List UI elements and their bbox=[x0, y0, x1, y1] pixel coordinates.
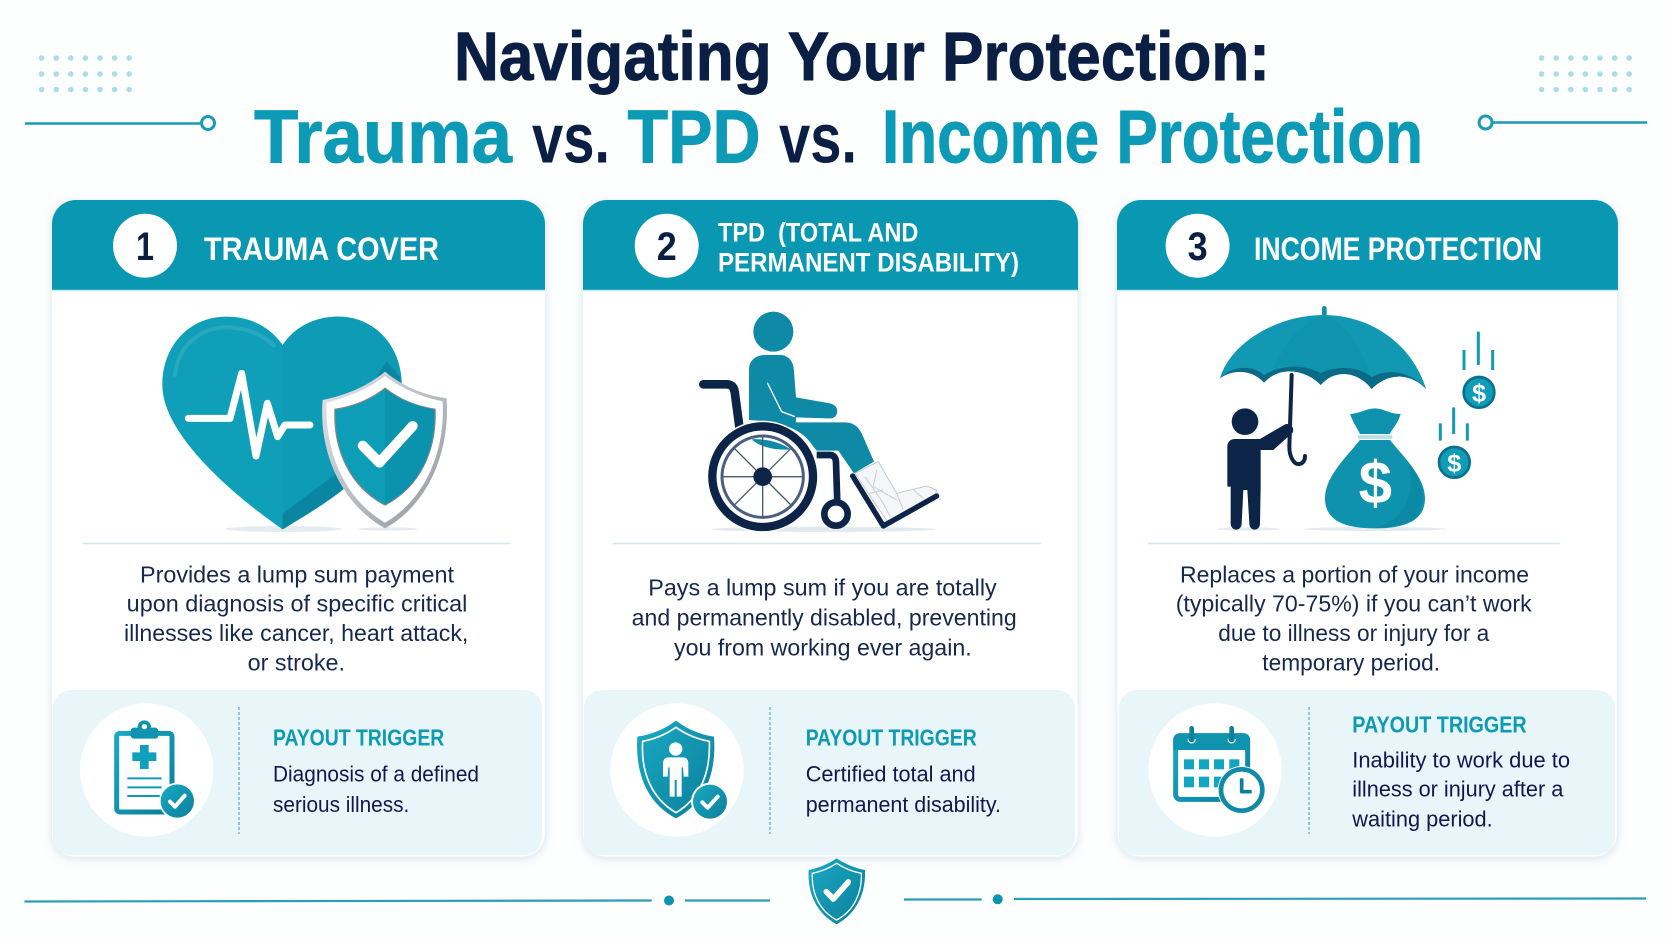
header band bbox=[583, 200, 1078, 290]
description text: illnesses like cancer, heart attack, bbox=[124, 620, 468, 646]
icon: calendar with clock bbox=[1173, 728, 1266, 814]
description text bbox=[1176, 561, 1532, 676]
footer divider with shield bbox=[24, 858, 1646, 924]
decoration: right title line bbox=[1479, 116, 1647, 129]
description text: upon diagnosis of specific critical bbox=[127, 591, 467, 617]
title: TPD bbox=[628, 95, 760, 179]
title: vs. bbox=[532, 100, 610, 178]
header band bbox=[1117, 200, 1618, 290]
header band: INCOME PROTECTION bbox=[1254, 231, 1542, 267]
payout text: Inability to work due to bbox=[1352, 748, 1570, 773]
description text: you from working ever again. bbox=[674, 634, 972, 660]
decoration: left title line bbox=[25, 116, 214, 130]
card background bbox=[582, 200, 1078, 857]
payout text: serious illness. bbox=[273, 792, 409, 817]
icon: umbrella, person and money bag: $ bbox=[1447, 449, 1461, 477]
panel: income protection bbox=[1117, 200, 1618, 857]
panel: trauma cover bbox=[52, 200, 546, 857]
header band: 1 bbox=[136, 225, 154, 269]
payout text bbox=[806, 725, 1001, 817]
icon: umbrella, person and money bag: $ bbox=[1359, 449, 1392, 516]
header band: 2 bbox=[657, 225, 677, 269]
icon: umbrella, person and money bag: $ bbox=[1472, 379, 1486, 407]
panel: TPD bbox=[582, 200, 1078, 857]
decoration: right dot grid bbox=[1539, 55, 1632, 92]
description text: temporary period. bbox=[1262, 650, 1440, 676]
payout text: waiting period. bbox=[1351, 807, 1493, 832]
title: Income Protection bbox=[882, 95, 1423, 179]
payout text: PAYOUT TRIGGER bbox=[1352, 712, 1527, 738]
description text: and permanently disabled, preventing bbox=[632, 604, 1017, 630]
description text: Replaces a portion of your income bbox=[1180, 561, 1529, 587]
description text: Provides a lump sum payment bbox=[140, 561, 455, 587]
title: Navigating Your Protection: bbox=[454, 18, 1270, 95]
header band: TPD (TOTAL AND bbox=[718, 218, 918, 248]
icon: clipboard bbox=[117, 720, 196, 819]
title bbox=[254, 18, 1423, 179]
payout trigger box bbox=[53, 690, 542, 855]
title: vs. bbox=[779, 100, 857, 178]
payout text: PAYOUT TRIGGER bbox=[273, 725, 445, 751]
description text: (typically 70-75%) if you can’t work bbox=[1176, 591, 1532, 617]
header band: 3 bbox=[1188, 225, 1208, 269]
header band bbox=[52, 200, 545, 290]
description text bbox=[632, 575, 1017, 660]
icon: heart with shield bbox=[162, 317, 447, 532]
description text: Pays a lump sum if you are totally bbox=[648, 575, 997, 601]
payout text: illness or injury after a bbox=[1352, 777, 1564, 802]
icon: wheelchair user bbox=[703, 312, 937, 533]
icon: footer shield bbox=[809, 858, 865, 924]
payout text bbox=[1351, 712, 1570, 832]
decoration: left dot grid bbox=[39, 55, 132, 92]
header band: TRAUMA COVER bbox=[204, 231, 439, 267]
title: Trauma bbox=[254, 95, 513, 179]
icon: umbrella, person and money bag bbox=[1217, 308, 1494, 531]
payout text: Diagnosis of a defined bbox=[273, 762, 479, 787]
payout text: permanent disability. bbox=[806, 792, 1001, 817]
icon: shield with person bbox=[637, 721, 729, 821]
description text: or stroke. bbox=[248, 650, 345, 676]
card background bbox=[52, 200, 546, 857]
payout text bbox=[273, 725, 479, 817]
header band: PERMANENT DISABILITY) bbox=[718, 248, 1019, 278]
card background bbox=[1117, 200, 1618, 857]
payout trigger box bbox=[584, 690, 1075, 855]
payout text: PAYOUT TRIGGER bbox=[806, 725, 977, 751]
payout text: Certified total and bbox=[806, 762, 976, 787]
description text bbox=[124, 561, 468, 676]
payout trigger box bbox=[1119, 690, 1615, 855]
description text: due to illness or injury for a bbox=[1218, 620, 1490, 646]
